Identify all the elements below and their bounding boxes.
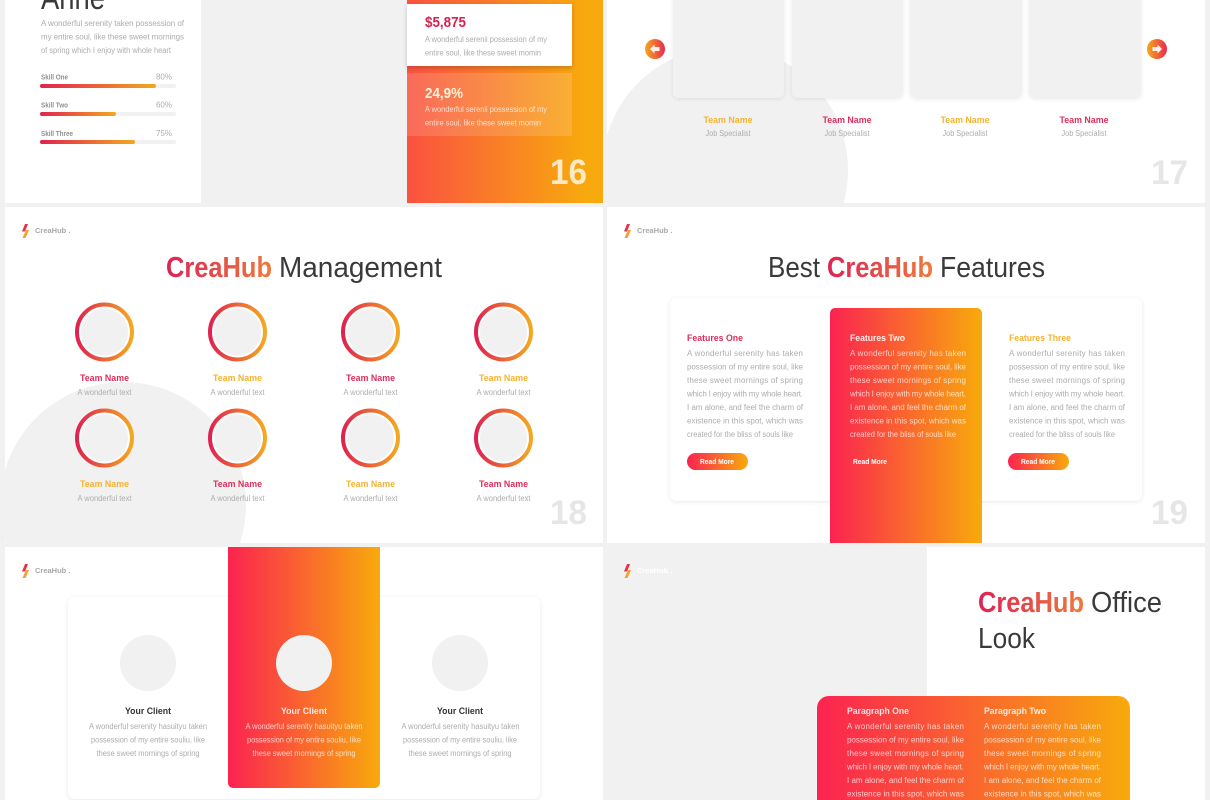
feature column: Features One: these sweet mornings of spring (687, 376, 803, 385)
team labels row 2: A wonderful text (78, 494, 132, 503)
team ring row 2 (77, 410, 531, 466)
column: Paragraph Two: I am alone, and feel the charm of (984, 776, 1102, 785)
feature column: Features Three: created for the bliss of souls like (1009, 430, 1116, 439)
feature column: Features Two (830, 308, 982, 543)
feature column: Features Two: which I enjoy with my whole heart. (849, 390, 966, 398)
button: Read More: Read More (700, 459, 734, 466)
client: centre highlighted: possession of my entire souliu, like (247, 736, 361, 744)
button: Read More: Read More (1021, 459, 1055, 466)
client: right: A wonderful serenity hasuityu taken (402, 722, 520, 731)
icon: right arrow (1147, 39, 1167, 59)
card: $5,875: entire soul, like these sweet momin (425, 48, 541, 58)
team labels: Job Specialist (942, 129, 988, 138)
team labels row 1: Team Name (346, 373, 395, 384)
team ring row 1 (77, 304, 531, 360)
page number 19: 19 (1151, 494, 1188, 532)
team labels row 1: Team Name (479, 373, 528, 384)
feature column: Features Two: created for the bliss of souls like (850, 430, 957, 439)
column: Paragraph Two: existence in this spot, which was (984, 790, 1101, 798)
team labels row 1: Team Name (213, 373, 262, 384)
feature column: Features Two: possession of my entire soul, like (850, 362, 967, 372)
feature column: Features Three: which I enjoy with my whole heart. (1008, 390, 1125, 398)
column: Paragraph One: these sweet mornings of spring (847, 749, 964, 758)
client: centre highlighted (228, 547, 380, 788)
text block: intro: of spring which I enjoy with whole heart (41, 46, 172, 55)
panel: slide 16 (5, 0, 603, 203)
client: centre highlighted: these sweet mornings of spring (252, 749, 356, 758)
column: Paragraph One: possession of my entire soul, like (847, 736, 965, 744)
client: left: these sweet mornings of spring (96, 749, 200, 758)
logo (624, 564, 672, 578)
title (978, 587, 1162, 655)
team labels: Team Name (940, 115, 990, 126)
team labels row 2: A wonderful text (344, 494, 398, 503)
client: left: possession of my entire souliu, like (91, 736, 205, 744)
client card container (68, 597, 540, 799)
feature column: Features One: which I enjoy with my whole heart. (686, 390, 803, 398)
team labels: Job Specialist (824, 129, 870, 138)
title: Features (940, 252, 1045, 284)
bar chart: skills: 80% (156, 72, 172, 82)
feature column: Features One: possession of my entire soul, like (687, 362, 804, 372)
client: right: possession of my entire souliu, like (403, 736, 517, 744)
card: $5,875: A wonderful serenii possession of my (425, 35, 547, 44)
team labels row 2: Team Name (80, 479, 129, 490)
title (166, 252, 442, 284)
team labels row 1: Team Name (80, 373, 129, 384)
feature column: Features One (686, 333, 804, 470)
title: CreaHub (166, 252, 272, 284)
column: Paragraph One: Paragraph One (847, 706, 909, 717)
team labels row 1: A wonderful text (344, 388, 398, 397)
column: Paragraph One: which I enjoy with my whole heart. (846, 762, 964, 772)
feature column: Features Three (1008, 333, 1126, 470)
title: Management (279, 252, 442, 284)
feature column: Features Three: existence in this spot, which was (1009, 416, 1125, 426)
feature column: Features Two: A wonderful serenity has taken (850, 349, 966, 358)
team labels row 2 (78, 479, 531, 503)
team labels: Job Specialist (706, 129, 751, 138)
panel: slide 21 (607, 547, 1205, 800)
gradient card (817, 696, 1130, 800)
feature column: Features Three: these sweet mornings of spring (1009, 376, 1125, 385)
team labels: Team Name (822, 115, 872, 126)
client: left: Your Client (125, 706, 172, 717)
column: Paragraph Two: which I enjoy with my whole heart. (983, 762, 1101, 772)
card: 24,9%: 24,9% (425, 85, 463, 102)
team labels row 2: Team Name (479, 479, 528, 490)
bar chart: skills: 60% (156, 100, 172, 110)
column: Paragraph Two: these sweet mornings of spring (984, 749, 1101, 758)
team labels row 1: A wonderful text (210, 388, 265, 397)
column: Paragraph One: I am alone, and feel the charm of (847, 776, 965, 785)
title (768, 252, 1045, 284)
logo (624, 224, 672, 238)
icon: left arrow (645, 39, 665, 59)
page number 18: 18 (550, 494, 587, 532)
client: right (402, 635, 520, 758)
column: Paragraph Two: A wonderful serenity has taken (984, 722, 1101, 731)
logo: CreaHub . (35, 226, 70, 235)
feature card container (670, 298, 1142, 501)
bar chart: skills: Skill One (41, 74, 68, 82)
bar chart: skills (40, 72, 176, 144)
bar chart: skills: Skill Two (41, 102, 68, 110)
bar chart: skills: 75% (156, 129, 172, 138)
bar chart: skills: Skill Three (41, 131, 73, 138)
text block: intro: my entire soul, like these sweet mornings (41, 32, 184, 42)
client: centre highlighted: A wonderful serenity hasuityu taken (246, 722, 362, 731)
team labels row 2: A wonderful text (476, 494, 531, 503)
client: left (89, 635, 207, 758)
team labels row 1: A wonderful text (476, 388, 531, 397)
text block: intro: A wonderful serenity taken possession of (41, 19, 185, 28)
title: CreaHub (827, 252, 933, 284)
team cards (673, 0, 1141, 98)
panel: slide 19 (607, 207, 1205, 543)
logo: CreaHub . (637, 226, 672, 235)
column: Paragraph One (846, 706, 965, 798)
panel: slide 20 (5, 547, 603, 800)
team labels: Team Name (704, 115, 752, 126)
feature column: Features Three: I am alone, and feel the charm of (1009, 403, 1126, 412)
column: Paragraph Two (983, 706, 1102, 798)
team labels: Team Name (1060, 115, 1108, 126)
card: 24,9% (407, 73, 572, 136)
feature column: Features One: existence in this spot, which was (687, 416, 803, 426)
feature column: Features Two: Features Two (850, 333, 905, 344)
client: centre highlighted: Your Client (281, 706, 328, 717)
text block: intro (41, 19, 185, 55)
page number 16: 16 (550, 153, 587, 192)
logo (22, 564, 70, 578)
card: $5,875: $5,875 (425, 14, 466, 31)
logo: CreaHub . (35, 566, 70, 575)
feature column: Features Three: possession of my entire soul, like (1009, 362, 1126, 372)
team labels row 1 (78, 373, 531, 397)
team labels row 2: Team Name (346, 479, 395, 490)
column: Paragraph One: A wonderful serenity has taken (847, 722, 964, 731)
feature column: Features Two: I am alone, and feel the charm of (850, 403, 967, 412)
title: Look (978, 623, 1035, 655)
team labels row 2: Team Name (213, 479, 262, 490)
card: 24,9%: A wonderful serenii possession of my (425, 105, 547, 114)
title: CreaHub (978, 587, 1084, 619)
card: 24,9%: entire soul, like these sweet momin (425, 118, 541, 128)
feature column: Features Two: Read More (853, 459, 887, 466)
feature column: Features Three: A wonderful serenity has taken (1009, 349, 1125, 358)
feature column: Features One: created for the bliss of souls like (687, 430, 794, 439)
feature column: Features Two: existence in this spot, which was (850, 416, 966, 426)
feature column: Features One: I am alone, and feel the charm of (687, 403, 804, 412)
feature column: Features One: Features One (687, 333, 743, 344)
logo (22, 224, 70, 238)
page number 17: 17 (1151, 154, 1188, 192)
column: Paragraph Two: Paragraph Two (984, 706, 1046, 717)
logo: CreaHub . (637, 566, 672, 575)
team labels row 2: A wonderful text (210, 494, 265, 503)
client: left: A wonderful serenity hasuityu taken (89, 722, 207, 731)
team labels row 1: A wonderful text (78, 388, 132, 397)
team labels (704, 115, 1108, 138)
panel: slide 17 (607, 0, 1205, 203)
feature column: Features Two: these sweet mornings of spring (850, 376, 966, 385)
card: $5,875 (407, 4, 572, 66)
client: right: Your Client (437, 706, 484, 717)
feature column: Features Three: Features Three (1009, 333, 1071, 344)
title: Office (1091, 587, 1162, 619)
team labels: Job Specialist (1062, 129, 1107, 138)
client: right: these sweet mornings of spring (408, 749, 512, 758)
panel: slide 18 (5, 207, 603, 543)
column: Paragraph One: existence in this spot, which was (847, 790, 964, 798)
column: Paragraph Two: possession of my entire soul, like (984, 736, 1102, 744)
title: Best (768, 252, 820, 284)
feature column: Features One: A wonderful serenity has taken (687, 349, 803, 358)
